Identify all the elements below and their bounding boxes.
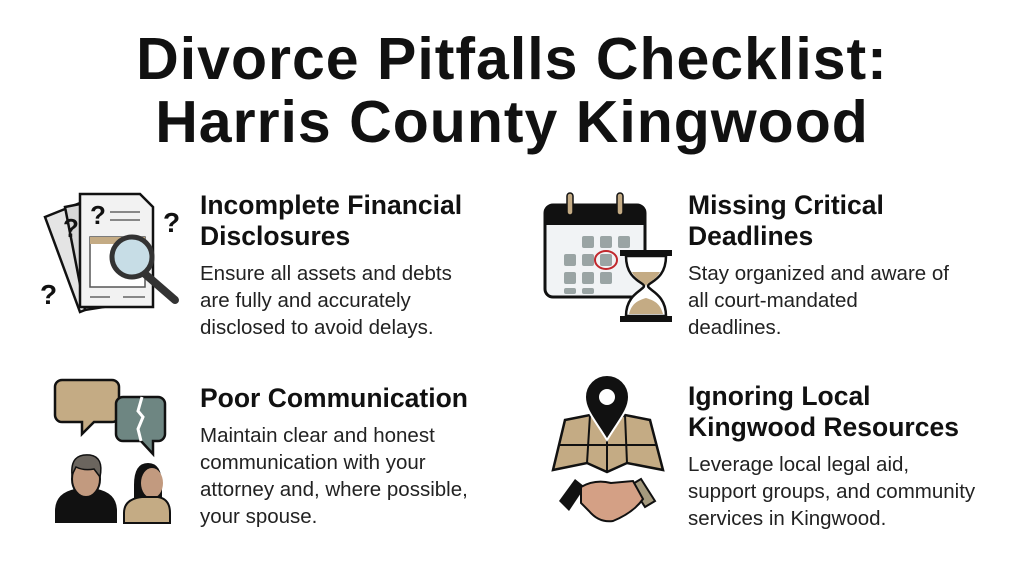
item: deadlines	[688, 190, 949, 339]
item: deadlines: Deadlines	[688, 221, 813, 251]
item: financial disclosures: Disclosures	[200, 221, 350, 251]
item: financial disclosures: Ensure all assets and debts	[200, 262, 452, 285]
item: financial disclosures	[200, 190, 462, 339]
title: Harris County Kingwood	[155, 89, 869, 155]
item: deadlines: all court-mandated	[688, 289, 858, 312]
icon: map and handshake	[551, 376, 665, 522]
icon: calendar and hourglass	[544, 192, 672, 322]
title	[136, 26, 888, 155]
icon: documents with magnifier: ?	[163, 207, 180, 238]
item: communication: Poor Communication	[200, 383, 468, 413]
icon: documents with magnifier: ?	[90, 200, 106, 230]
item: deadlines: Missing Critical	[688, 190, 884, 220]
item: financial disclosures: disclosed to avoid delays.	[200, 316, 434, 339]
item: local resources: support groups, and community	[688, 480, 975, 503]
item: communication	[200, 383, 468, 528]
item: deadlines: Stay organized and aware of	[688, 262, 949, 285]
item: local resources: Leverage local legal aid,	[688, 453, 909, 476]
item: communication: attorney and, where possible,	[200, 478, 468, 501]
item: communication: your spouse.	[200, 505, 317, 528]
item: communication: communication with your	[200, 451, 426, 474]
item: local resources: Ignoring Local	[688, 381, 871, 411]
title: Divorce Pitfalls Checklist:	[136, 26, 888, 92]
item: financial disclosures: Incomplete Financial	[200, 190, 462, 220]
icon: communication people	[54, 378, 171, 524]
item: local resources	[688, 381, 975, 530]
item: deadlines: deadlines.	[688, 316, 781, 339]
icon: documents with magnifier: ?	[40, 279, 57, 310]
icon: documents with magnifier: ?	[63, 213, 79, 243]
icon: documents with magnifier	[40, 192, 180, 314]
item: local resources: services in Kingwood.	[688, 507, 886, 530]
item: financial disclosures: are fully and accurately	[200, 289, 411, 312]
item: local resources: Kingwood Resources	[688, 412, 959, 442]
item: communication: Maintain clear and honest	[200, 424, 435, 447]
